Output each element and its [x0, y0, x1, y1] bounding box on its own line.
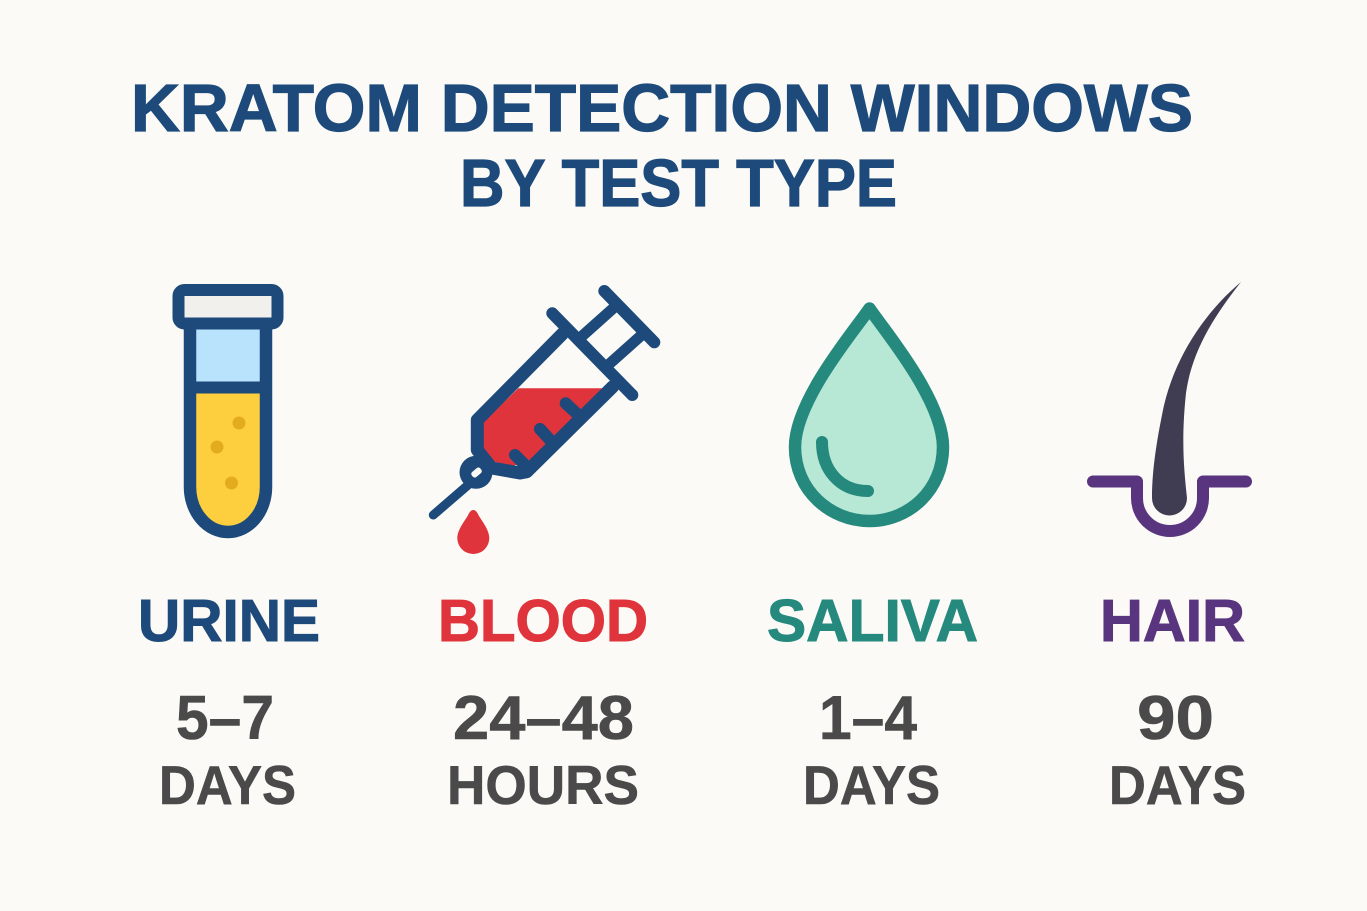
label: saliva: SALIVA: [767, 588, 978, 654]
icon: test tube: [178, 290, 278, 532]
icon: hair follicle: [1093, 282, 1246, 531]
detection window: blood: 24–48: [453, 684, 634, 753]
icon: blood drop: [457, 510, 489, 554]
detection window: hair: DAYS: [1109, 754, 1246, 816]
detection window: hair: 90: [1137, 684, 1214, 753]
icon: syringe: [433, 291, 654, 515]
panel: blood: [433, 291, 654, 816]
detection window: urine: 5–7: [176, 684, 274, 753]
detection window: saliva: DAYS: [803, 754, 940, 816]
title: BY TEST TYPE: [460, 146, 897, 221]
panel: urine: [138, 290, 320, 816]
title: KRATOM DETECTION WINDOWS: [131, 71, 1193, 146]
label: urine: URINE: [138, 588, 320, 654]
label: hair: HAIR: [1100, 588, 1245, 654]
label: blood: BLOOD: [438, 588, 648, 654]
detection window: urine: [159, 684, 296, 816]
detection window: saliva: 1–4: [819, 684, 917, 753]
title: [131, 71, 1193, 221]
detection window: urine: DAYS: [159, 754, 296, 816]
panel: hair: [1093, 282, 1246, 816]
detection window: blood: HOURS: [447, 754, 639, 816]
panel: saliva: [767, 308, 978, 816]
icon: saliva drop: [795, 308, 943, 521]
detection window: hair: [1109, 684, 1246, 816]
detection window: blood: [447, 684, 639, 816]
detection window: saliva: [803, 684, 940, 816]
